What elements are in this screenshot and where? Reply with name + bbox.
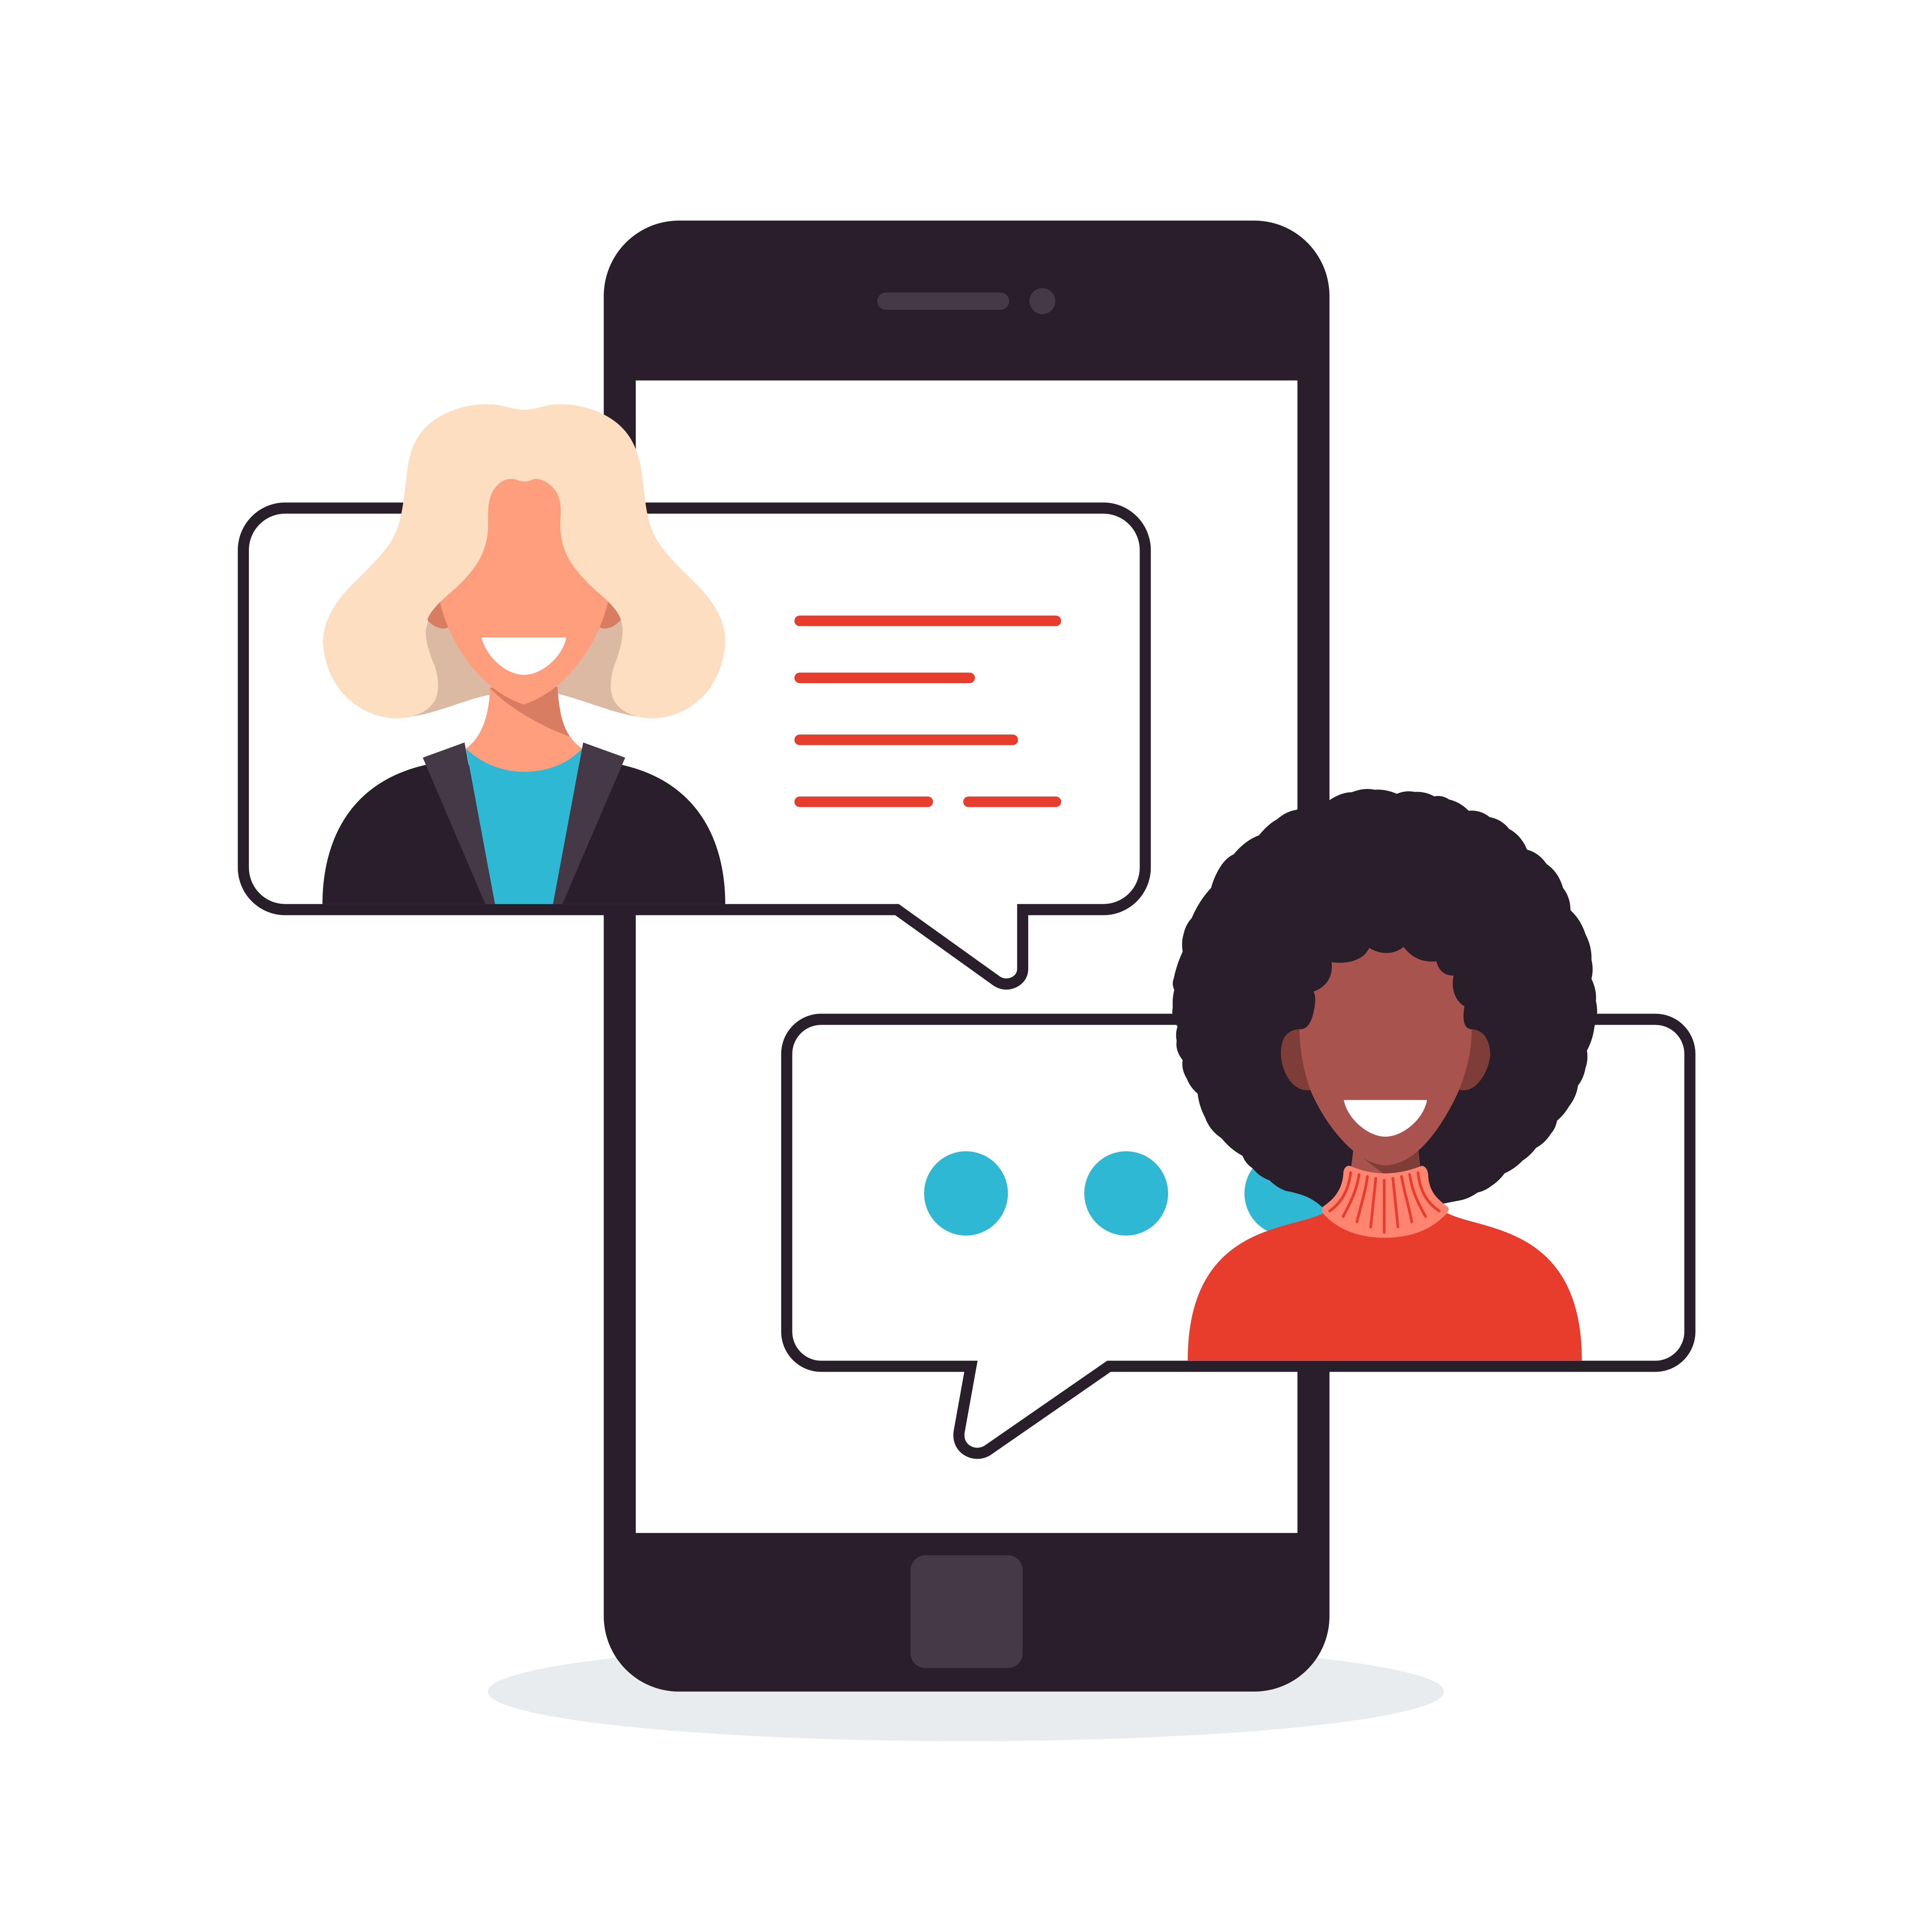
smile	[1344, 1100, 1427, 1137]
phone speaker	[877, 293, 1009, 310]
neck shadow	[1353, 1150, 1420, 1173]
speech bubble: typing	[787, 1019, 1690, 1453]
neck	[466, 687, 582, 772]
collar ribs	[1330, 1173, 1439, 1232]
back hair	[407, 620, 642, 717]
left ear	[1281, 1029, 1311, 1090]
person: blond woman in jacket	[322, 404, 725, 904]
phone home button	[911, 1555, 1023, 1668]
smile	[481, 638, 566, 675]
phone body	[604, 221, 1330, 1692]
phone camera	[1029, 288, 1055, 314]
red sweater	[1188, 1213, 1582, 1361]
person: woman with afro in red sweater	[1172, 789, 1597, 1361]
front hair	[323, 404, 725, 718]
jacket	[322, 765, 725, 904]
right ear	[1460, 1029, 1490, 1090]
ear shadows	[421, 598, 628, 629]
neck shadow	[490, 687, 570, 737]
phone screen	[636, 381, 1298, 1533]
message text lines	[800, 621, 1056, 802]
face	[1299, 947, 1472, 1165]
speech bubble: woman with blond hair	[243, 508, 1145, 984]
turtleneck collar	[1322, 1166, 1449, 1238]
face	[440, 475, 608, 704]
left lapel	[423, 743, 495, 904]
ground shadow	[488, 1642, 1444, 1741]
typing indicator dots	[924, 1151, 1328, 1236]
neck	[1350, 1150, 1421, 1173]
teal shirt	[466, 748, 582, 904]
right lapel	[553, 743, 625, 904]
smartphone	[604, 221, 1330, 1692]
afro hair	[1172, 789, 1597, 1207]
